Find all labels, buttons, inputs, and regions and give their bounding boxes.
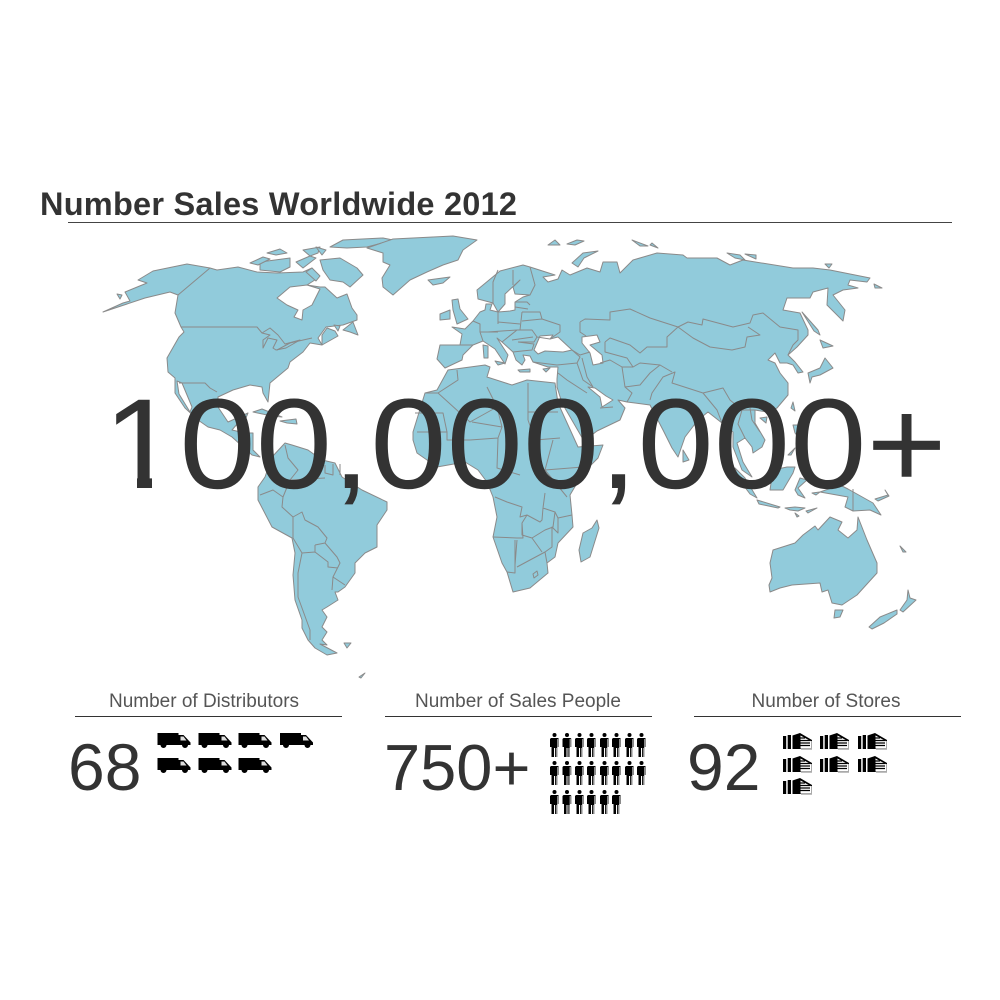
map: South America — [258, 443, 387, 655]
title: Number Sales Worldwide 2012 — [40, 186, 517, 222]
panel: distributors — [68, 691, 342, 804]
distributors number: 68 — [68, 730, 141, 804]
map: Falklands and South Georgia — [344, 643, 365, 678]
icons: people — [550, 733, 646, 814]
map: Tasmania — [834, 610, 843, 618]
map: New Guinea — [820, 485, 881, 515]
map: Madagascar — [579, 520, 599, 562]
map: Persian Gulf — [588, 387, 613, 407]
map: Southeast Asia islands — [735, 448, 820, 517]
map: New Zealand — [869, 590, 916, 629]
world map — [103, 236, 916, 678]
sales people number: 750+ — [384, 731, 530, 804]
map: Arctic islands — [250, 238, 393, 287]
map: Hudson Bay — [277, 285, 320, 320]
map: Baltic Sea — [498, 280, 530, 312]
map: European and Asian islands — [440, 240, 882, 462]
map: Australia — [769, 517, 877, 605]
panel: sales people — [384, 691, 652, 814]
big number: 100,000,000+ — [103, 373, 947, 516]
map: Black Sea — [534, 335, 572, 354]
map: Gulf of California — [177, 381, 192, 412]
map: Eurasia — [437, 253, 870, 477]
map: Africa — [413, 365, 603, 592]
map: country borders — [178, 267, 853, 640]
icons: stores — [783, 733, 887, 794]
map: Pacific islands — [875, 490, 906, 552]
sales people heading: Number of Sales People — [415, 691, 621, 712]
stores heading: Number of Stores — [752, 691, 900, 712]
map: Iceland — [428, 277, 450, 285]
map: Caribbean — [253, 409, 297, 424]
distributors heading: Number of Distributors — [109, 691, 299, 712]
icons: trucks — [158, 733, 313, 773]
map: Greenland — [367, 236, 477, 295]
panel: stores — [687, 691, 961, 804]
map: North America — [103, 264, 357, 457]
map: Caspian Sea — [582, 335, 603, 365]
map: Great Lakes — [262, 328, 300, 350]
stores number: 92 — [687, 730, 760, 804]
map: Newfoundland and Nova Scotia — [117, 294, 358, 345]
